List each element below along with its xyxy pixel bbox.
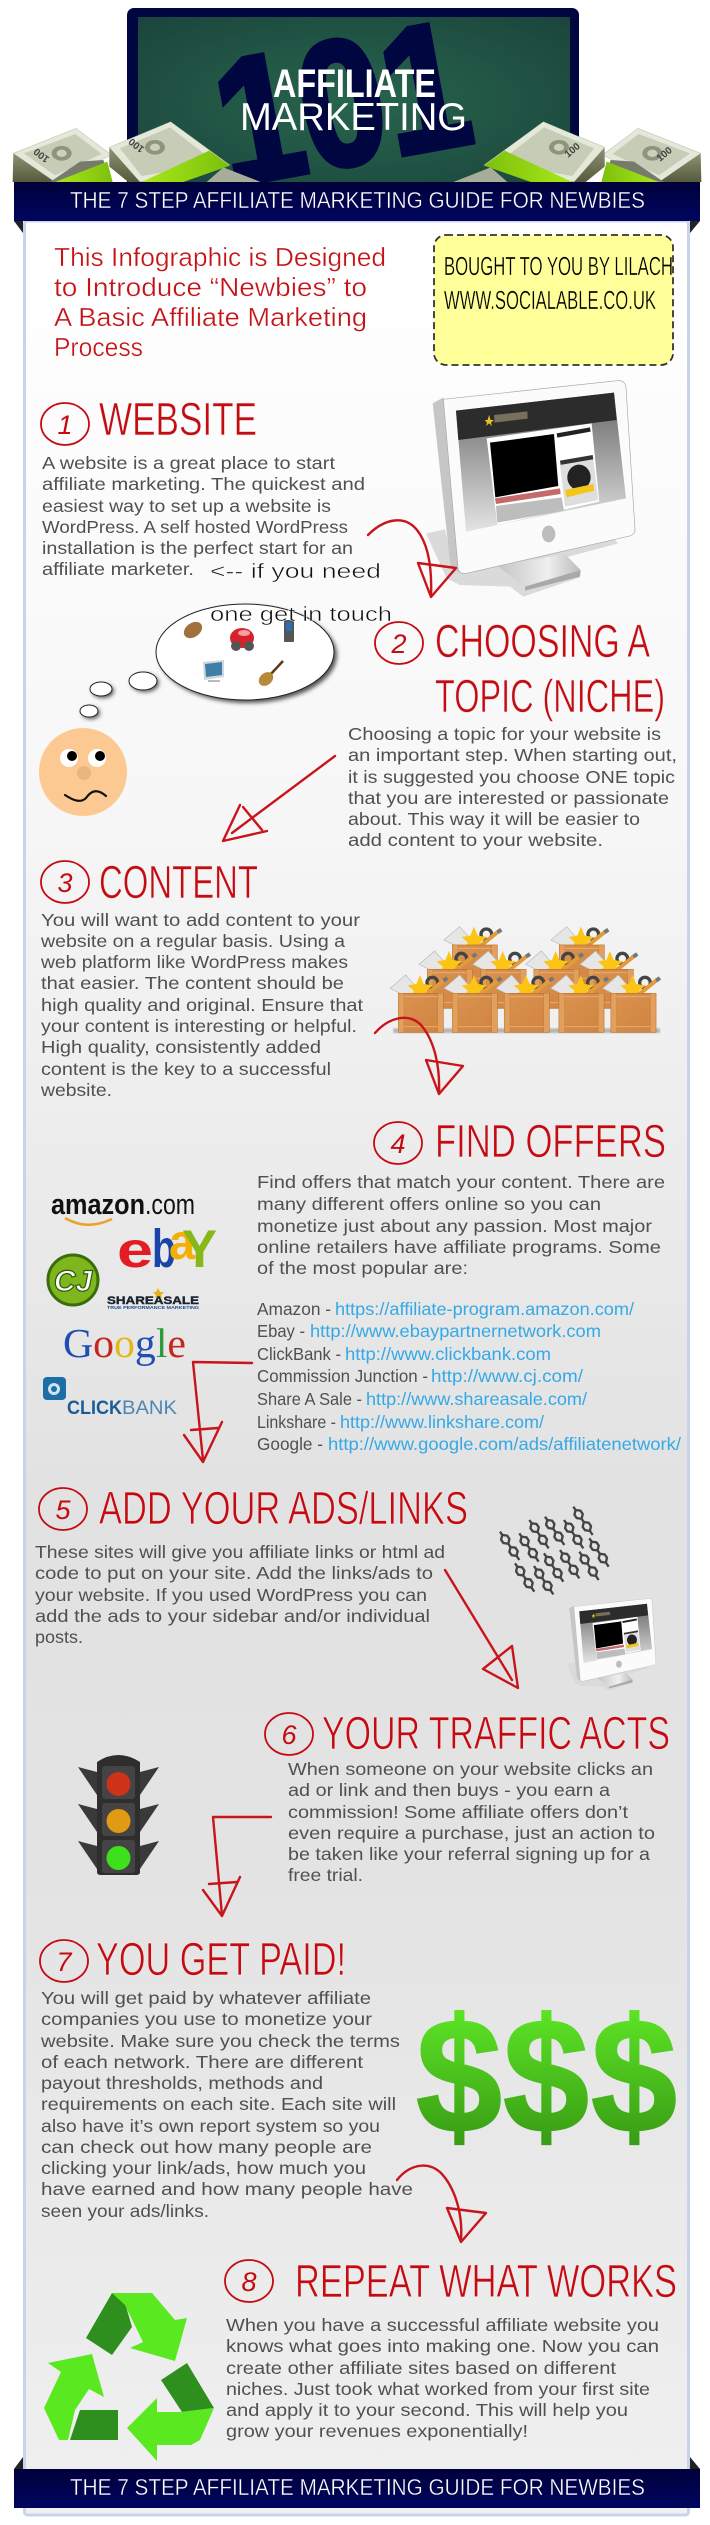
affiliate links list: http://www.google.com/ads/affiliatenetwork/ [328,1434,681,1454]
affiliate links list: Linkshare - [257,1412,336,1432]
step 7 text: companies you use to monetize your [41,2009,372,2029]
bottom banner [14,2457,700,2508]
arrow to step 3 [223,756,335,841]
panel: step 5 add your ads [35,1482,656,1691]
step 7 text [40,1988,413,2221]
step 3 heading: CONTENT [99,856,258,908]
icon: small monitor [566,1599,656,1691]
step 2 text: add content to your website. [348,830,603,850]
affiliate links list: ClickBank - [257,1344,341,1364]
step 5 heading: 5 [55,1495,71,1525]
logo: shareasale [107,1288,200,1310]
step 6 text: be taken like your referral signing up for a [288,1844,650,1864]
bill denominations: 100 [127,135,147,154]
step 3 text: your content is interesting or helpful. [41,1016,357,1036]
step 8 text: grow your revenues exponentially! [226,2421,528,2441]
illustration: thinking face [39,604,337,816]
step 7 text: have earned and how many people have [41,2179,413,2199]
logo: clickbank: CLICK [67,1398,122,1419]
bill denominations [32,135,675,164]
icon: chain links [497,1505,612,1596]
step 7 text: of each network. There are different [41,2052,363,2072]
icon: dollar signs [416,1984,677,2167]
step 1 text: A website is a great place to start [42,453,335,473]
logo: amazon: amazon [51,1189,145,1221]
thought bubble [80,604,337,719]
step 4 text: online retailers have affiliate programs. Some [257,1237,661,1257]
step 5 heading [39,1482,468,1534]
icon: dollar signs: $ [503,1984,589,2167]
affiliate links list: Amazon - [257,1299,331,1319]
panel: step 2 choosing a topic [223,615,677,850]
step 6 text [288,1759,655,1885]
step 3 text [40,910,363,1100]
step 2 text: about. This way it will be easier to [348,809,640,829]
arrow to step 5 [184,1362,252,1462]
step 8 text: create other affiliate sites based on different [226,2358,616,2378]
step 5 text: posts. [35,1627,83,1647]
step 4 text: monetize just about any passion. Most major [257,1216,652,1236]
step 4 heading: 4 [390,1129,406,1159]
step 1 text: affiliate marketing. The quickest and [42,474,365,494]
intro text: to Introduce “Newbies” to [54,272,367,302]
step 8 text: knows what goes into making one. Now you can [226,2336,659,2356]
affiliate links list: https://affiliate-program.amazon.com/ [335,1299,634,1319]
step 1 text: installation is the perfect start for an [42,538,353,558]
panel: step 7 you get paid [40,1933,677,2242]
intro text: Process [54,332,143,362]
callout: credit box [434,235,673,365]
step 8 text: When you have a successful affiliate website you [226,2315,659,2335]
logo: ebay [117,1214,217,1279]
title: marketing: MARKETING [240,96,467,139]
step 1 heading: 1 [57,410,73,440]
step 6 text: free trial. [288,1865,363,1885]
step 3 heading [41,856,258,908]
icon: traffic light [78,1755,159,1875]
step 7 text: requirements on each site. Each site will [41,2094,396,2114]
affiliate links list: Google - [257,1434,323,1454]
intro text [54,242,386,362]
step 3 text: You will want to add content to your [41,910,360,930]
step 3 text: content is the key to a successful [41,1059,331,1079]
handwritten note continued: one get in touch [210,604,392,626]
step 5 text: These sites will give you affiliate links or html ad [35,1542,445,1562]
step 3 text: that easier. The content should be [41,973,344,993]
step 6 text: When someone on your website clicks an [288,1759,653,1779]
step 3 heading: 3 [57,868,73,898]
step 1 heading: WEBSITE [99,393,257,445]
intro text: This Infographic is Designed [54,242,386,272]
arrow to step 4 [375,1018,463,1094]
logo: ebay: a [169,1214,196,1270]
step 8 text: niches. Just took what worked from your first site [226,2379,650,2399]
step 7 text: You will get paid by whatever affiliate [41,1988,371,2008]
affiliate links list: http://www.linkshare.com/ [340,1412,544,1432]
icon: dollar signs: $ [416,1984,502,2167]
step 5 text [35,1542,445,1647]
logo: commission junction [48,1255,98,1305]
panel: step 1 website [41,381,635,597]
icon: phone [284,620,294,642]
step 2 text [348,724,677,850]
step 7 text: payout thresholds, methods and [41,2073,323,2093]
step 1 text [42,453,365,579]
icon: recycle arrows [44,2293,214,2461]
step 7 text: clicking your link/ads, how much you [41,2158,366,2178]
step 7 heading: 7 [56,1947,72,1977]
icon: monitor [426,381,635,597]
panel: step 6 your traffic acts [78,1707,670,1916]
affiliate links list: http://www.ebaypartnernetwork.com [310,1321,601,1341]
logo: shareasale: TRUE PERFORMANCE MARKETING [107,1305,200,1310]
handwritten note: <-- if you need [210,561,381,583]
logo: amazon: .com [145,1189,195,1221]
bottom banner: THE 7 STEP AFFILIATE MARKETING GUIDE FOR NEWBIES [70,2474,645,2500]
logo: ebay: e [117,1222,153,1278]
step 2 text: Choosing a topic for your website is [348,724,661,744]
affiliate links list: Commission Junction - [257,1366,428,1386]
step 7 text: website. Make sure you check the terms [40,2031,400,2051]
icon: crates of content [390,927,660,1033]
bill denominations: 100 [563,141,583,160]
face [39,728,127,816]
step 4 text: many different offers online so you can [257,1194,601,1214]
icon: small monitor [203,660,224,682]
panel: step 4 find offers [43,1115,681,1462]
step 4 text [257,1172,665,1278]
icon: football [181,619,205,641]
step 1 text: WordPress. A self hosted WordPress [42,517,348,537]
affiliate links list: Share A Sale - [257,1389,362,1409]
icon: guitar [256,661,283,689]
icon: money stacks left [13,122,261,182]
icon: dollar signs: $ [591,1984,677,2167]
bill denominations: 100 [655,145,675,164]
step 7 text: can check out how many people are [41,2137,372,2157]
step 1 text: affiliate marketer. [42,559,194,579]
logo: clickbank [43,1377,177,1419]
affiliate links list: http://www.shareasale.com/ [366,1389,587,1409]
top banner: THE 7 STEP AFFILIATE MARKETING GUIDE FOR NEWBIES [70,187,645,213]
step 7 text: seen your ads/links. [41,2201,209,2221]
step 2 heading: 2 [390,629,407,659]
step 3 text: High quality, consistently added [41,1037,321,1057]
step 8 text: and apply it to your second. This will help you [226,2400,628,2420]
logo: clickbank: BANK [122,1398,177,1419]
step 4 text: Find offers that match your content. There are [257,1172,665,1192]
step 4 heading [374,1115,666,1167]
title board [127,0,579,223]
step 1 text: easiest way to set up a website is [42,496,331,516]
top banner [14,182,700,233]
step 8 text [226,2315,659,2441]
step 4 text: of the most popular are: [257,1258,468,1278]
arrow to step 6 [445,1570,518,1688]
step 2 heading [375,615,665,722]
bill denominations: 100 [32,145,52,164]
step 6 text: commission! Some affiliate offers don’t [288,1802,628,1822]
step 6 text: even require a purchase, just an action to [288,1823,655,1843]
logo: amazon [51,1189,195,1225]
step 3 text: high quality and original. Ensure that [41,995,363,1015]
step 5 text: your website. If you used WordPress you can [35,1585,427,1605]
step 7 text: also have it’s own report system so you [41,2116,380,2136]
step 3 text: website on a regular basis. Using a [40,931,345,951]
icon: car [230,628,254,651]
title: affiliate: AFFILIATE [273,62,436,106]
affiliate links list: Ebay - [257,1321,305,1341]
affiliate links list [257,1299,681,1454]
step 2 text: that you are interested or passionate [348,788,669,808]
arrow to step 2 [368,520,456,597]
step 5 text: code to put on your site. Add the links/ads to [35,1563,433,1583]
logo: google: Google [63,1320,186,1366]
intro text: A Basic Affiliate Marketing [54,302,367,332]
panel: step 3 content [40,856,660,1100]
step 7 heading [40,1933,346,1985]
step 5 heading: ADD YOUR ADS/LINKS [99,1482,468,1534]
icon: money stacks right [453,122,701,182]
step 6 heading: 6 [281,1720,297,1750]
step 8 heading: 8 [241,2267,257,2297]
logo: ebay: Y [182,1220,217,1279]
step 5 text: add the ads to your sidebar and/or individual [35,1606,430,1626]
step 1 heading [41,393,257,445]
step 6 text: ad or link and then buys - you earn a [288,1780,610,1800]
logo: shareasale: SHAREASALE [107,1295,199,1307]
step 2 text: it is suggested you choose ONE topic [348,767,675,787]
logo: ebay: b [152,1219,176,1279]
step 3 text: web platform like WordPress makes [40,952,348,972]
step 2 text: an important step. When starting out, [348,745,677,765]
step 3 text: website. [40,1080,112,1100]
arrow to step 7 [203,1817,271,1916]
arrow to step 8 [397,2166,486,2242]
step 7 heading: YOU GET PAID! [96,1933,346,1985]
affiliate links list: http://www.clickbank.com [345,1344,551,1364]
panel: step 8 repeat what works [44,2255,677,2461]
affiliate links list: http://www.cj.com/ [431,1366,583,1386]
logo: commission junction: CJ [54,1265,93,1298]
